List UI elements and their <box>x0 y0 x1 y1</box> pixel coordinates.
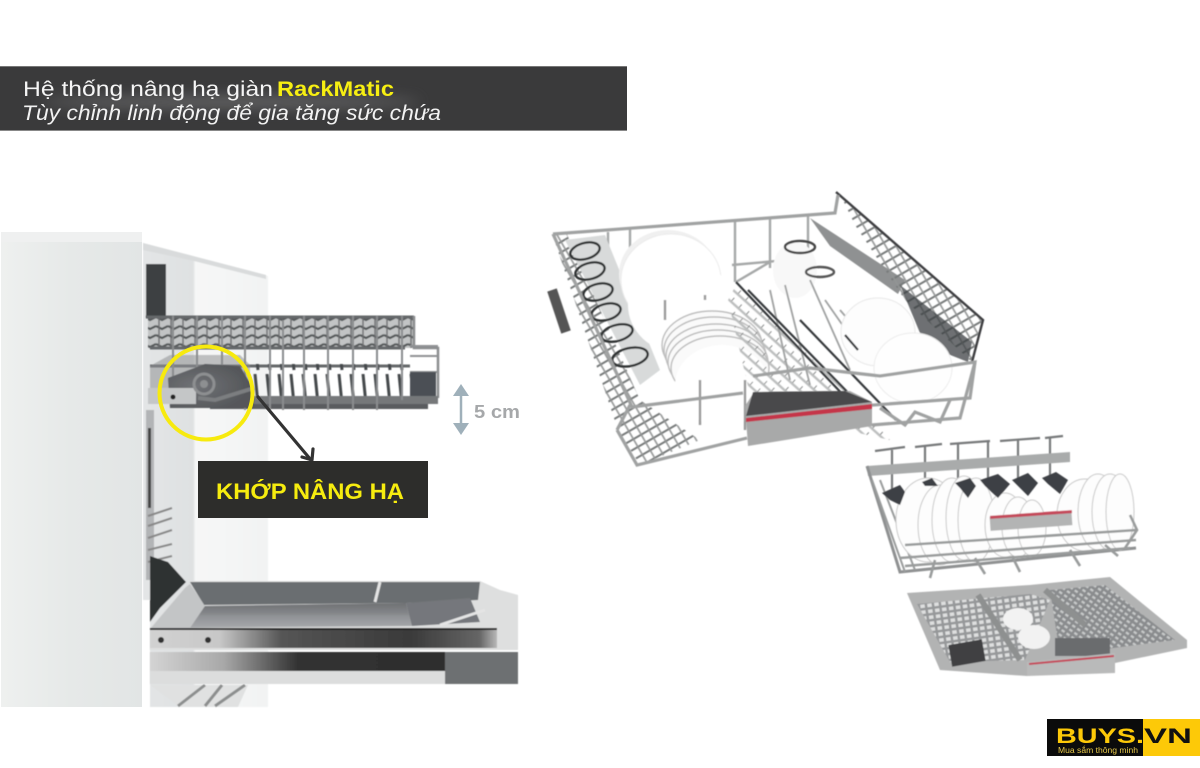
label box: lifting joint <box>198 461 428 518</box>
handle <box>990 510 1072 531</box>
label: yellow highlight circle <box>160 346 252 440</box>
upper rack side view <box>146 316 438 410</box>
heading: RackMatic system: Hệ thống nâng hạ giàn <box>23 78 273 101</box>
rack handle <box>745 391 872 446</box>
rack rims <box>553 195 975 465</box>
dark tines <box>736 282 896 420</box>
bowls <box>841 298 952 403</box>
logo: BUYS.VN: VN <box>1144 725 1192 748</box>
right side wire wall <box>836 192 983 362</box>
rack rail <box>867 452 1136 572</box>
dishwasher door panel <box>1 232 142 707</box>
arrow: from joint to label <box>258 397 313 460</box>
side bracket <box>552 290 566 332</box>
tray handle <box>1027 653 1115 676</box>
plates <box>896 474 1134 565</box>
illustration: rack and cutlery tray <box>867 436 1187 676</box>
rear rack wires <box>608 214 810 282</box>
label: 5 cm: 5 cm <box>474 402 520 422</box>
illustration: upper rack loaded with dishes <box>552 192 983 465</box>
glasses on right <box>770 241 870 385</box>
wine glass holders <box>875 436 1063 490</box>
cutlery tray <box>907 577 1187 676</box>
logo: BUYS.VN: BUYS. <box>1056 725 1144 748</box>
rack lower wires <box>900 515 1137 578</box>
left side wire wall <box>553 232 700 465</box>
illustration: dishwasher side view with pulled-out rack <box>1 232 520 707</box>
arrow: 5 cm height adjustment <box>453 384 520 435</box>
label box: lifting joint: KHỚP NÂNG HẠ <box>216 479 404 504</box>
header banner <box>0 66 627 131</box>
cup shelf flap <box>810 218 905 294</box>
logo: BUYS.VN: Mua sắm thông minh <box>1058 746 1138 755</box>
plates <box>619 230 769 430</box>
glasses row on left <box>565 235 660 385</box>
wire floor <box>728 285 890 440</box>
dividers <box>978 590 1085 660</box>
logo: BUYS.VN <box>1047 719 1200 756</box>
door open tray <box>150 581 518 684</box>
subheading: Tùy chỉnh linh động để gia tăng sức chứa <box>22 102 441 125</box>
dishwasher side body <box>143 243 268 707</box>
heading: RackMatic highlight: RackMatic <box>277 78 394 101</box>
cups in tray <box>1003 608 1033 630</box>
hanging glasses <box>882 472 1068 505</box>
